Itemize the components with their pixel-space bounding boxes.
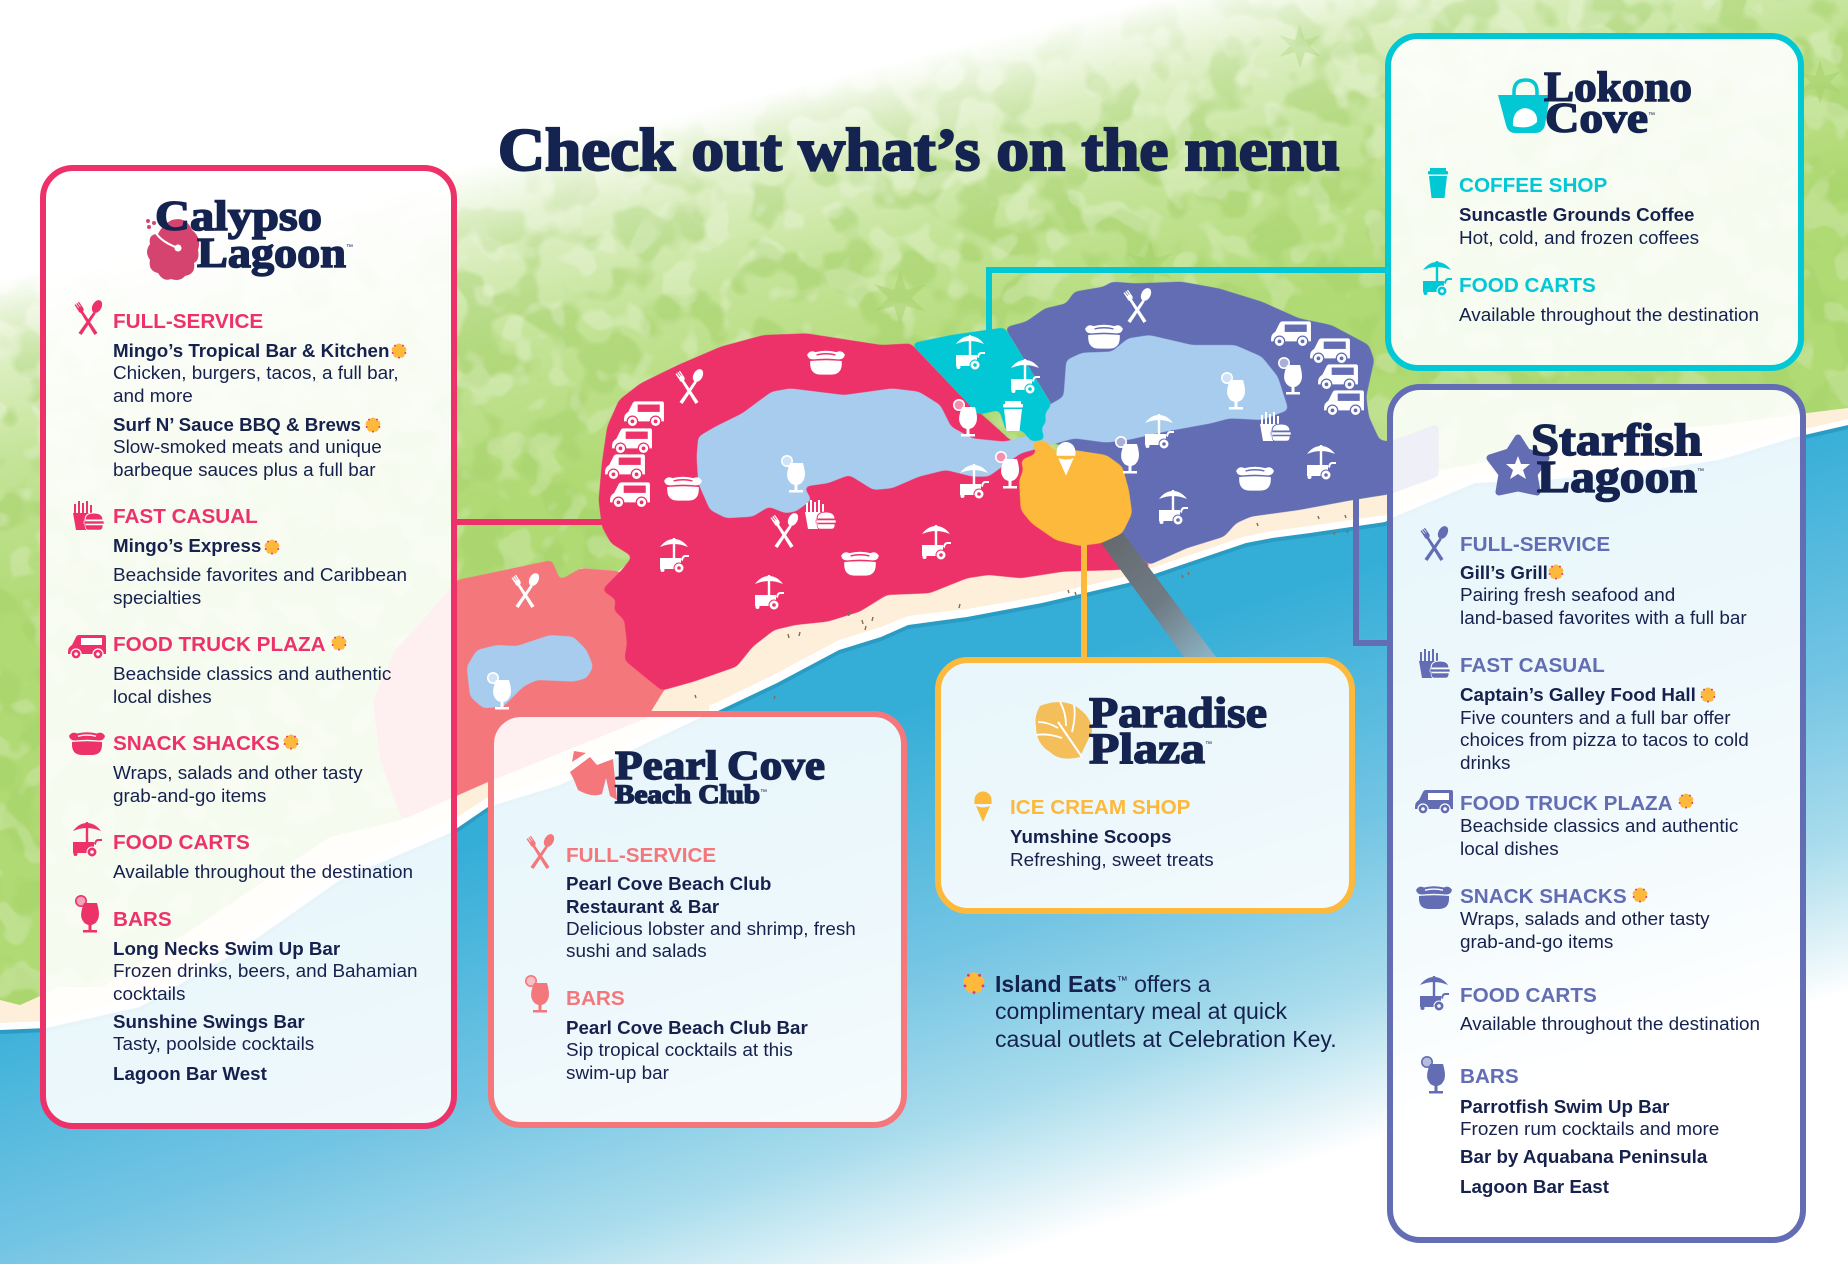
- section: full-service: FULL-SERVICE: [566, 844, 716, 867]
- map icons: [487, 286, 1364, 710]
- callout: Island Eats: casual outlets at Celebration Key.: [995, 1026, 1337, 1052]
- title: Check out what’s on the menu: [498, 117, 1340, 183]
- connector: Paradise Plaza: [1081, 540, 1087, 657]
- icon: food cart: [960, 464, 989, 499]
- connector: Lokono Cove: [989, 270, 1385, 330]
- icon: fries and burger: [805, 500, 836, 529]
- panel: Paradise Plaza: [938, 660, 1352, 911]
- icon: cutlery: [676, 367, 705, 404]
- icon: drink: [1221, 372, 1245, 410]
- section: full-service: and more: [113, 386, 193, 407]
- icon: hot dog: [664, 477, 702, 501]
- section: fast casual: FAST CASUAL: [1460, 654, 1605, 677]
- logo: Calypso Lagoon: Calypso: [155, 194, 322, 240]
- icon: coffee cup: [1003, 401, 1023, 431]
- section: food truck plaza: FOOD TRUCK PLAZA: [1460, 792, 1673, 815]
- section: bars: Lagoon Bar East: [1460, 1176, 1610, 1197]
- logo: Paradise Plaza: Plaza: [1089, 726, 1205, 773]
- section: snack shacks: Wraps, salads and other tasty: [113, 763, 363, 784]
- section: full-service: land-based favorites with a full bar: [1460, 608, 1747, 629]
- section: food carts: [1423, 261, 1759, 326]
- icon: hot dog: [1085, 325, 1123, 349]
- icon: cutlery: [1124, 286, 1153, 323]
- section: bars: [1421, 1056, 1719, 1197]
- icon: truck: [624, 401, 664, 427]
- section: full-service: Slow-smoked meats and unique: [113, 437, 382, 458]
- section: bars: [525, 975, 808, 1084]
- section: snack shacks: [1416, 885, 1710, 953]
- icon: truck: [612, 428, 652, 454]
- section: coffee shop: Hot, cold, and frozen coffees: [1459, 228, 1699, 249]
- panel: Starfish Lagoon: [1390, 387, 1803, 1240]
- icon: drink: [953, 399, 977, 436]
- section: bars: Frozen rum cocktails and more: [1460, 1119, 1719, 1140]
- background: green island vegetation: [0, 0, 1848, 1005]
- section: food carts: [1420, 976, 1760, 1035]
- shoreline edge: [0, 427, 1848, 1032]
- district: Paradise Plaza land: [1019, 440, 1132, 546]
- section: full-service: Delicious lobster and shrimp, fresh: [566, 919, 856, 940]
- section: bars: Parrotfish Swim Up Bar: [1460, 1096, 1670, 1117]
- callout: Island Eats: Island Eats: [995, 971, 1117, 997]
- logo: Pearl Cove Beach Club: Beach Club: [615, 780, 760, 809]
- icon: drink: [781, 455, 805, 492]
- section: full-service: FULL-SERVICE: [113, 310, 263, 333]
- section: full-service: Mingo’s Tropical Bar & Kitchen: [113, 340, 389, 361]
- section: bars: BARS: [1460, 1065, 1519, 1088]
- logo: Calypso Lagoon: ™: [346, 244, 353, 251]
- logo: Starfish Lagoon: Starfish: [1531, 415, 1702, 465]
- section: full-service: Gill’s Grill: [1460, 562, 1548, 583]
- section: fast casual: Mingo’s Express: [113, 535, 261, 556]
- connector: Starfish Lagoon: [1356, 498, 1387, 643]
- section: snack shacks: [69, 732, 363, 807]
- section: snack shacks: SNACK SHACKS: [113, 732, 280, 755]
- section: full-service: barbeque sauces plus a full bar: [113, 460, 376, 481]
- background: beach: [0, 380, 1848, 1023]
- logo: Pearl Cove Beach Club: ™: [760, 789, 767, 796]
- section: fast casual: choices from pizza to tacos to cold: [1460, 730, 1749, 751]
- icon: food cart: [1145, 414, 1174, 449]
- district: Starfish Lagoon land: [1005, 282, 1439, 565]
- section: food carts: FOOD CARTS: [1459, 274, 1596, 297]
- logo: Pearl Cove Beach Club: [570, 742, 825, 809]
- logo: Calypso Lagoon: [146, 194, 353, 280]
- section: food truck plaza: [1415, 790, 1738, 860]
- section: bars: Frozen drinks, beers, and Bahamian: [113, 961, 418, 982]
- section: full-service: sushi and salads: [566, 941, 707, 962]
- section: full-service: Chicken, burgers, tacos, a full bar,: [113, 363, 399, 384]
- logo: Starfish Lagoon: [1490, 415, 1704, 502]
- icon: hot dog: [807, 351, 845, 375]
- section: food truck plaza: local dishes: [1460, 839, 1559, 860]
- section: full-service: [526, 832, 856, 962]
- icon: truck: [1271, 321, 1311, 347]
- section: ice cream shop: ICE CREAM SHOP: [1010, 796, 1191, 819]
- section: fast casual: Five counters and a full bar offer: [1460, 708, 1731, 729]
- section: food carts: [73, 822, 413, 883]
- walkway to beach: [1101, 533, 1216, 657]
- section: bars: Tasty, poolside cocktails: [113, 1034, 314, 1055]
- section: ice cream shop: [974, 792, 1214, 871]
- icon: drink: [1278, 357, 1302, 394]
- section: bars: BARS: [566, 987, 625, 1010]
- section: ice cream shop: Yumshine Scoops: [1010, 826, 1172, 847]
- panel: Pearl Cove Beach Club: [491, 714, 904, 1125]
- section: fast casual: drinks: [1460, 753, 1510, 774]
- section: fast casual: [73, 501, 407, 609]
- beach people: [695, 515, 1348, 699]
- logo: Starfish Lagoon: Lagoon: [1537, 452, 1697, 502]
- panel: Calypso Lagoon: [43, 168, 454, 1126]
- section: fast casual: Captain’s Galley Food Hall: [1460, 684, 1696, 705]
- section: food carts: Available throughout the destination: [1460, 1014, 1760, 1035]
- section: fast casual: [1419, 649, 1749, 774]
- icon: truck: [1324, 390, 1364, 416]
- icon: food cart: [660, 538, 689, 573]
- icon: food cart: [956, 335, 985, 370]
- icon: drink: [487, 672, 511, 710]
- section: food carts: FOOD CARTS: [1460, 984, 1597, 1007]
- logo: Lokono Cove: [1498, 65, 1692, 142]
- section: full-service: Surf N’ Sauce BBQ & Brews: [113, 414, 361, 435]
- section: bars: Pearl Cove Beach Club Bar: [566, 1017, 808, 1038]
- icon: fries and burger: [1260, 412, 1291, 441]
- section: coffee shop: COFFEE SHOP: [1459, 174, 1607, 197]
- callout: Island Eats: offers a: [1128, 971, 1211, 997]
- icon: food cart: [1011, 359, 1040, 394]
- section: bars: Lagoon Bar West: [113, 1063, 268, 1084]
- icon: cutlery: [770, 511, 800, 548]
- district: Calypso Lagoon land: [599, 333, 1155, 691]
- logo: Pearl Cove Beach Club: Pearl: [615, 742, 718, 788]
- connector: Calypso Lagoon: [457, 519, 605, 525]
- callout: Island Eats: complimentary meal at quick: [995, 998, 1288, 1024]
- logo: Calypso Lagoon: Lagoon: [197, 231, 346, 277]
- section: full-service: Pearl Cove Beach Club: [566, 873, 771, 894]
- section: fast casual: FAST CASUAL: [113, 505, 258, 528]
- section: snack shacks: SNACK SHACKS: [1460, 885, 1627, 908]
- icon: food cart: [1159, 490, 1188, 525]
- section: bars: Sip tropical cocktails at this: [566, 1040, 793, 1061]
- section: full-service: Pairing fresh seafood and: [1460, 585, 1675, 606]
- section: food carts: Available throughout the destination: [113, 862, 413, 883]
- section: ice cream shop: Refreshing, sweet treats: [1010, 850, 1214, 871]
- pier stripes: [655, 697, 709, 711]
- logo: Lokono Cove: Cove: [1545, 96, 1648, 142]
- logo: Paradise Plaza: ™: [1205, 741, 1212, 748]
- lake: Pearl Cove: [467, 635, 593, 708]
- section: bars: cocktails: [113, 984, 185, 1005]
- icon: drink: [1115, 436, 1139, 474]
- section: full-service: Restaurant & Bar: [566, 896, 720, 917]
- section: fast casual: Beachside favorites and Caribbean: [113, 565, 407, 586]
- logo: Starfish Lagoon: ™: [1697, 468, 1704, 475]
- icon: truck: [605, 454, 645, 480]
- callout: Island Eats: ™: [1117, 975, 1128, 987]
- section: bars: Sunshine Swings Bar: [113, 1011, 305, 1032]
- logo: Lokono Cove: Lokono: [1544, 65, 1692, 111]
- section: snack shacks: grab-and-go items: [1460, 932, 1613, 953]
- logo: Pearl Cove Beach Club: Cove: [727, 742, 825, 788]
- panel: Lokono Cove: [1388, 36, 1801, 368]
- icon: food cart: [1307, 445, 1336, 480]
- section: full-service: FULL-SERVICE: [1460, 533, 1610, 556]
- section: coffee shop: [1428, 168, 1699, 249]
- section: food truck plaza: Beachside classics and authentic: [113, 664, 391, 685]
- district: Pearl Cove Beach Club land: [373, 560, 700, 820]
- icon: ice cream: [1056, 442, 1076, 476]
- logo: Paradise Plaza: Paradise: [1089, 690, 1267, 737]
- section: fast casual: specialties: [113, 588, 201, 609]
- section: bars: BARS: [113, 908, 172, 931]
- section: food truck plaza: [68, 633, 391, 708]
- icon: food cart: [922, 525, 951, 560]
- section: coffee shop: Suncastle Grounds Coffee: [1459, 204, 1694, 225]
- section: bars: [75, 895, 418, 1084]
- callout: Island Eats: [964, 971, 1337, 1052]
- icon: truck: [1310, 338, 1350, 364]
- section: food truck plaza: FOOD TRUCK PLAZA: [113, 633, 326, 656]
- logo: Lokono Cove: ™: [1648, 112, 1655, 119]
- section: food carts: Available throughout the destination: [1459, 305, 1759, 326]
- section: bars: Bar by Aquabana Peninsula: [1460, 1146, 1708, 1167]
- icon: hot dog: [841, 552, 879, 576]
- section: bars: swim-up bar: [566, 1063, 669, 1084]
- icon: truck: [1318, 364, 1358, 390]
- district: Lokono Cove land: [911, 327, 1052, 442]
- lagoon water: [697, 335, 1289, 518]
- icon: food cart: [755, 575, 784, 610]
- section: full-service: [74, 298, 406, 481]
- logo: Paradise Plaza: [1036, 690, 1267, 773]
- section: food truck plaza: local dishes: [113, 687, 212, 708]
- section: bars: Long Necks Swim Up Bar: [113, 938, 341, 959]
- section: food carts: FOOD CARTS: [113, 831, 250, 854]
- icon: truck: [610, 482, 650, 508]
- section: food truck plaza: Beachside classics and authentic: [1460, 816, 1738, 837]
- icon: hot dog: [1236, 467, 1274, 491]
- section: snack shacks: grab-and-go items: [113, 786, 266, 807]
- icon: drink: [995, 451, 1019, 488]
- icon: cutlery: [512, 571, 541, 608]
- section: full-service: [1420, 524, 1747, 629]
- section: snack shacks: Wraps, salads and other tasty: [1460, 909, 1710, 930]
